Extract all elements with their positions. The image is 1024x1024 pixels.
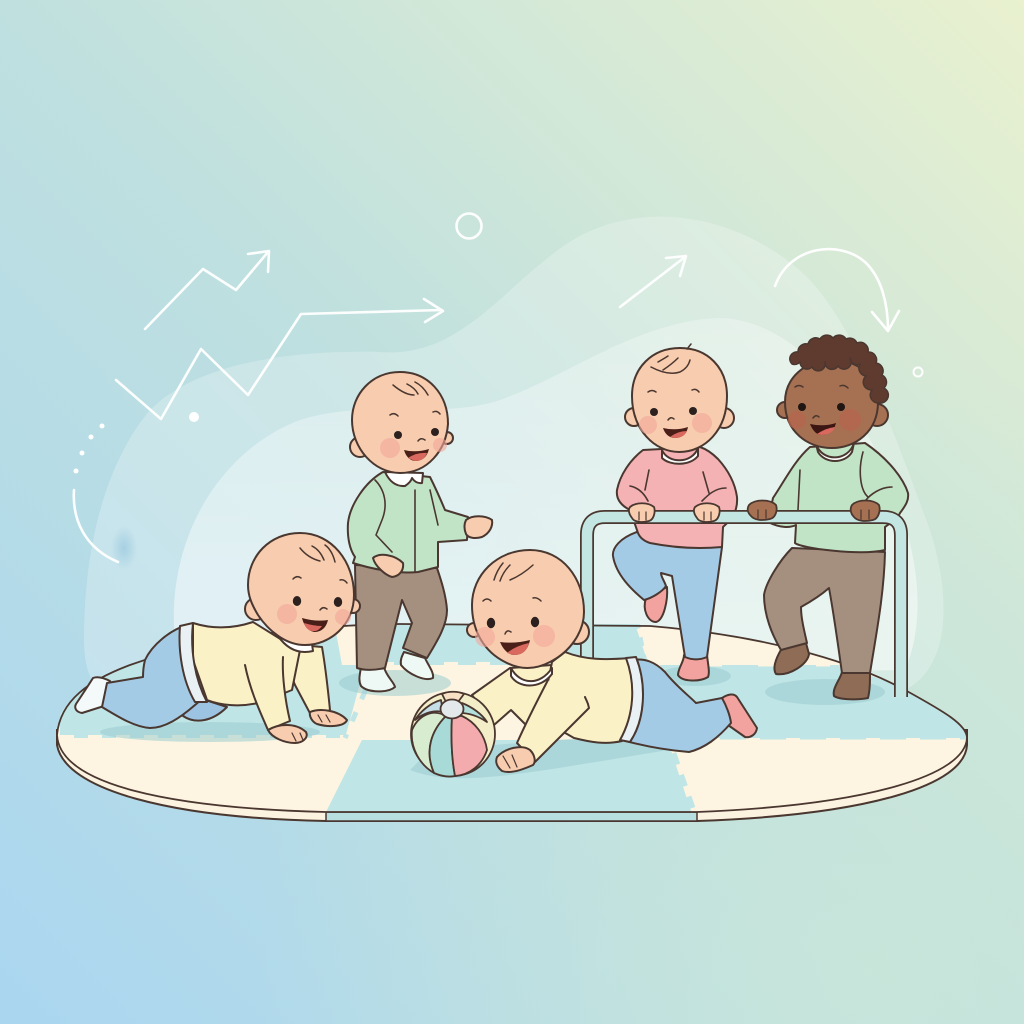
head: [632, 348, 727, 452]
standing foot: [834, 672, 870, 699]
socks: [359, 667, 395, 691]
far arm: [285, 645, 330, 717]
baby: pink top behind frame: [613, 344, 737, 681]
mat top: [57, 624, 967, 812]
curved arrow: [775, 249, 899, 331]
mat teal tiles: [60, 624, 966, 812]
baby: dark skin behind frame: [764, 335, 908, 699]
hands: [464, 516, 492, 538]
play mat: [57, 624, 967, 821]
baby: standing left: [348, 372, 492, 691]
baby: crawling left: [75, 533, 360, 743]
collar: [385, 472, 423, 486]
standing foot: [678, 655, 709, 681]
sweater: [617, 447, 737, 548]
mat rim: [57, 730, 967, 821]
sock: [75, 677, 110, 713]
far leg: [183, 695, 227, 721]
near arm: [517, 680, 589, 762]
near arm: [245, 657, 290, 730]
straight arrow: [620, 256, 686, 307]
collar: [278, 636, 313, 652]
raised foot: [774, 643, 809, 674]
mat jigsaw edges: [60, 628, 966, 812]
circle: [456, 214, 482, 238]
ears: [245, 598, 267, 620]
curly hair: [790, 335, 888, 403]
hand: [268, 725, 307, 743]
dots: [74, 412, 199, 474]
walking frame: [587, 517, 901, 697]
waistband: [620, 657, 643, 742]
head: [785, 360, 878, 448]
baby: crawling centre: [467, 550, 757, 772]
head: [352, 372, 448, 473]
far arm and chest: [472, 665, 552, 727]
sweater: [193, 622, 300, 705]
small circle: [914, 368, 922, 376]
trousers: [764, 548, 885, 673]
sweater: [548, 652, 636, 743]
growth arrows and decorations: [74, 214, 922, 562]
mat top outline: [57, 624, 967, 812]
trousers: [613, 532, 722, 659]
collar: [662, 448, 698, 464]
trousers: [622, 660, 731, 752]
raised foot: [645, 587, 667, 622]
collar: [511, 668, 552, 686]
sweater: [768, 443, 908, 552]
ears: [565, 620, 589, 644]
trousers: [102, 625, 207, 728]
mat rim teal section: [326, 812, 697, 821]
trousers: [355, 565, 447, 670]
ball: [411, 692, 495, 777]
small zigzag arrow: [145, 251, 269, 329]
head: [472, 550, 584, 668]
soft shadows: [100, 666, 885, 778]
left curved arrow: [74, 490, 118, 562]
waistband: [180, 623, 207, 702]
hand: [496, 747, 535, 772]
jumper: [348, 472, 468, 573]
head: [248, 533, 354, 645]
neck and collar: [816, 443, 854, 461]
hands on frame: [629, 500, 880, 522]
large zigzag arrow: [116, 299, 443, 419]
background blobs: [84, 217, 944, 690]
foot: [722, 694, 757, 737]
